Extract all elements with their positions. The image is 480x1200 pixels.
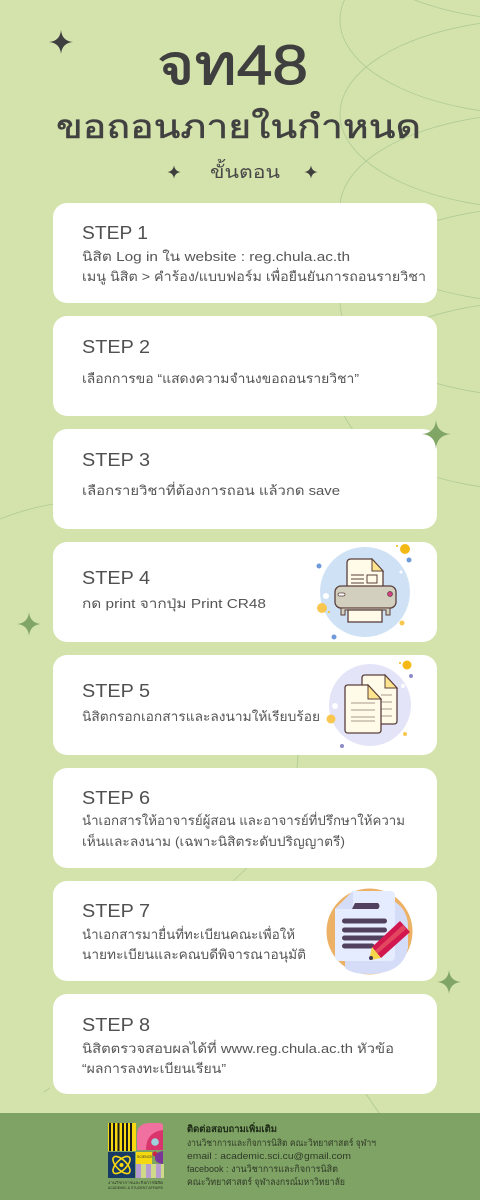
contact text: ติดต่อสอบถามเพิ่มเติม bbox=[187, 1121, 277, 1135]
section label with sparkles bbox=[168, 159, 318, 182]
icon: green sparkle lower right bbox=[437, 970, 461, 994]
panel: step 5: นิสิตกรอกเอกสารและลงนามให้เรียบร้อย bbox=[82, 709, 320, 724]
panel: step 6: STEP 6 bbox=[82, 788, 150, 808]
logo: ACADEMIC & STUDENT AFFAIRS bbox=[108, 1186, 163, 1190]
icon: sparkle top left bbox=[49, 30, 73, 54]
panel: step 2 bbox=[53, 316, 437, 416]
panel: step 6 bbox=[53, 768, 437, 868]
panel: step 6: นำเอกสารให้อาจารย์ผู้สอน และอาจารย์ที่ปรึกษาให้ความ bbox=[82, 812, 405, 829]
panel: step 2: เลือกการขอ “แสดงความจำนงขอถอนรายวิชา” bbox=[82, 371, 359, 386]
panel: step 7 bbox=[53, 881, 437, 981]
panel: step 8: STEP 8 bbox=[82, 1015, 150, 1035]
panel: step 1: เมนู นิสิต > คำร้อง/แบบฟอร์ม เพื่อยืนยันการถอนรายวิชา bbox=[82, 268, 426, 285]
panel: step 4: กด print จากปุ่ม Print CR48 bbox=[82, 596, 266, 612]
contact text: งานวิชาการและกิจการนิสิต คณะวิทยาศาสตร์ จุฬาฯ bbox=[187, 1137, 376, 1149]
subtitle: ขอถอนภายในกำหนด bbox=[56, 108, 421, 145]
panel: step 3 bbox=[53, 429, 437, 529]
panel: step 7: นำเอกสารมายื่นที่ทะเบียนคณะเพื่อให้ bbox=[82, 926, 295, 942]
panel: step 4: STEP 4 bbox=[82, 568, 150, 588]
icon: green sparkle right bbox=[422, 420, 451, 449]
icon: documents bbox=[326, 660, 413, 748]
panel: step 6: เห็นและลงนาม (เฉพาะนิสิตระดับปริญญาตรี) bbox=[82, 832, 345, 849]
panel: step 7: STEP 7 bbox=[82, 901, 150, 921]
panel: step 8: “ผลการลงทะเบียนเรียน” bbox=[82, 1061, 226, 1076]
logo: งานวิชาการและกิจการนิสิต bbox=[108, 1180, 164, 1185]
panel: step 8 bbox=[53, 994, 437, 1094]
panel: step 1 bbox=[53, 203, 437, 303]
panel: step 4 bbox=[53, 542, 437, 642]
contact text bbox=[187, 1121, 376, 1188]
panel: step 5 bbox=[53, 655, 437, 755]
icon: printer bbox=[316, 544, 412, 640]
icon: document and pencil bbox=[326, 888, 412, 974]
panel: step 1: นิสิต Log in ใน website : reg.chula.ac.th bbox=[82, 249, 350, 264]
contact text: email : academic.sci.cu@gmail.com bbox=[187, 1151, 351, 1162]
panel: step 3: เลือกรายวิชาที่ต้องการถอน แล้วกด save bbox=[82, 482, 340, 498]
panel: step 1: STEP 1 bbox=[82, 223, 148, 243]
logo bbox=[108, 1123, 164, 1190]
panel: step 7: นายทะเบียนและคณบดีพิจารณาอนุมัติ bbox=[82, 947, 306, 963]
section label with sparkles: ขั้นตอน bbox=[210, 159, 280, 182]
logo: SCIENCE bbox=[137, 1155, 153, 1159]
contact text: คณะวิทยาศาสตร์ จุฬาลงกรณ์มหาวิทยาลัย bbox=[187, 1176, 345, 1188]
panel: step 2: STEP 2 bbox=[82, 337, 150, 357]
panel: step 8: นิสิตตรวจสอบผลได้ที่ www.reg.chula.ac.th หัวข้อ bbox=[82, 1040, 394, 1056]
icon: green sparkle left bbox=[17, 612, 41, 636]
footer bbox=[0, 1113, 480, 1200]
panel: step 3: STEP 3 bbox=[82, 450, 150, 470]
contact text: facebook : งานวิชาการและกิจการนิสิต bbox=[187, 1164, 338, 1175]
title: จท48 bbox=[157, 33, 308, 96]
panel: step 5: STEP 5 bbox=[82, 681, 150, 701]
